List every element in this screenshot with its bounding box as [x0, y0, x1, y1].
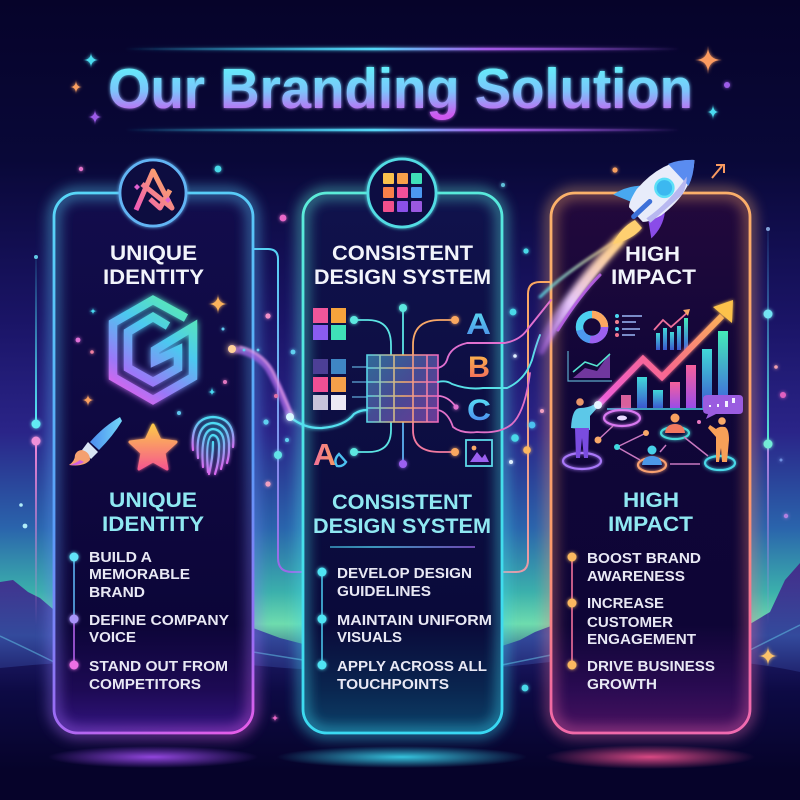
list: consistent design system: MAINTAIN UNIFORM [337, 613, 492, 629]
list: unique identity: DEFINE COMPANY [89, 613, 229, 629]
heading: high impact [611, 243, 696, 289]
small arrow [712, 165, 724, 178]
list: high impact: CUSTOMER [587, 615, 674, 631]
icon: hexagon G logo [113, 300, 193, 400]
list: high impact: GROWTH [587, 677, 657, 693]
heading: high impact lower [608, 489, 693, 536]
wave ribbon crossing panels [232, 300, 551, 432]
heading: unique identity lower: UNIQUE [109, 489, 197, 512]
sparkles and dots around logo [76, 294, 228, 415]
rocket body [612, 138, 713, 238]
title bottom line [125, 129, 680, 131]
icon: image frame [466, 440, 492, 466]
person bottom [642, 446, 662, 465]
panel: unique identity [54, 160, 253, 733]
heading: consistent design system: DESIGN SYSTEM [314, 266, 491, 289]
bullet timeline [70, 552, 78, 670]
wave start glow [228, 345, 236, 353]
heading: unique identity lower: IDENTITY [102, 513, 204, 536]
icon: paintbrush [69, 417, 122, 465]
list: unique identity: BRAND [89, 585, 145, 601]
title: Our Branding Solution [108, 57, 693, 121]
speech bubble [703, 395, 743, 419]
list: consistent design system: VISUALS [337, 630, 402, 646]
list: high impact: INCREASE [587, 596, 664, 612]
side decorative vertical lines [19, 227, 772, 625]
heading: unique identity [103, 242, 204, 289]
team network [563, 395, 743, 472]
rocket trail [540, 240, 620, 352]
letters A B C: A [466, 308, 491, 341]
connector: panel 1 to panel 2 [253, 249, 303, 572]
icon: typography: A [313, 437, 336, 472]
list: unique identity: MEMORABLE [89, 567, 190, 583]
icon: star [130, 425, 176, 469]
floor glows beneath panels [48, 745, 755, 769]
heading: unique identity: IDENTITY [103, 266, 204, 289]
divider [330, 546, 475, 548]
network links [598, 426, 708, 464]
icon: grid badge [368, 159, 436, 227]
wave middle glow [286, 413, 294, 421]
small line chart [568, 351, 612, 381]
heading: high impact lower: HIGH [623, 489, 679, 512]
title top line [125, 48, 680, 50]
list: high impact: BOOST BRAND [587, 551, 701, 567]
highlight spark [594, 401, 602, 409]
list: unique identity: COMPETITORS [89, 677, 201, 693]
heading: high impact lower: IMPACT [608, 513, 693, 536]
list: unique identity [89, 550, 229, 693]
person right [697, 417, 729, 462]
connector nodes [350, 304, 459, 468]
icon: donut chart [580, 314, 605, 340]
ground [0, 658, 800, 800]
list: consistent design system [337, 566, 492, 693]
list: high impact: AWARENESS [587, 569, 685, 585]
heading: unique identity lower [102, 489, 204, 536]
list: consistent design system: TOUCHPOINTS [337, 677, 449, 693]
heading: consistent design system lower: DESIGN SYSTEM [313, 515, 491, 538]
panel 2 card [303, 193, 502, 733]
bar chart [607, 331, 730, 409]
bullet timeline [568, 552, 576, 670]
connector: panel 2 to panel 3 [502, 282, 551, 572]
mountains [0, 563, 800, 700]
letters A B C: B [468, 351, 490, 384]
list: high impact: ENGAGEMENT [587, 632, 696, 648]
list: high impact [587, 551, 715, 693]
heading: unique identity: UNIQUE [110, 242, 197, 265]
list: unique identity: VOICE [89, 630, 136, 646]
person left [571, 398, 598, 458]
panel 1 card [54, 193, 253, 733]
letters A B C [466, 308, 491, 427]
connector lines to central grid [352, 308, 456, 464]
icon: rocket [612, 138, 724, 244]
heading: high impact: IMPACT [611, 266, 696, 289]
network nodes [594, 416, 649, 450]
list: consistent design system: DEVELOP DESIGN [337, 566, 472, 582]
arrow: upward growth [598, 300, 733, 405]
list: consistent design system: APPLY ACROSS ALL [337, 659, 487, 675]
central grid [367, 355, 438, 422]
heading: high impact: HIGH [625, 243, 680, 266]
platform rings [563, 410, 735, 472]
letters A B C: C [467, 394, 491, 427]
panel: consistent design system [303, 159, 502, 733]
list: unique identity: BUILD A [89, 550, 153, 566]
panel: high impact [551, 193, 750, 733]
small bar chart [654, 309, 690, 350]
heading: consistent design system lower: CONSISTENT [332, 491, 472, 514]
list: high impact: DRIVE BUSINESS [587, 659, 715, 675]
title sparkles [70, 46, 730, 125]
color swatches [313, 308, 346, 410]
icon: typography [313, 437, 346, 472]
icon: fingerprint [193, 417, 233, 474]
panel 3 card [551, 193, 750, 733]
donut legend [615, 314, 642, 337]
heading: consistent design system: CONSISTENT [332, 242, 473, 265]
list: unique identity: STAND OUT FROM [89, 659, 228, 675]
icon: logo badge [120, 160, 186, 226]
heading: consistent design system lower [313, 491, 491, 538]
scattered particles [79, 166, 788, 722]
list: consistent design system: GUIDELINES [337, 584, 431, 600]
rocket flame [613, 220, 642, 244]
bullet timeline [318, 568, 326, 670]
person top [665, 414, 685, 433]
heading: consistent design system [314, 242, 491, 289]
